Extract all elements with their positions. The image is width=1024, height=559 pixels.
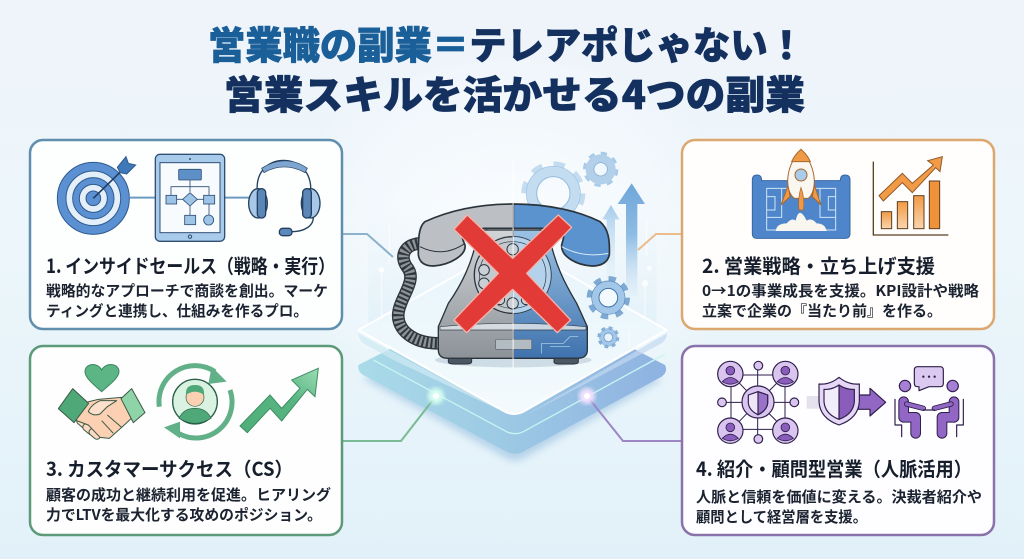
panel 3: customer success: [30, 346, 342, 535]
description: [696, 486, 982, 527]
heading: 3. カスタマーサクセス（CS）: [46, 453, 293, 482]
icon: shield and arrow: [819, 377, 886, 425]
icons row: network, shield, meeting: [718, 361, 963, 443]
icon: customer cycle: [159, 366, 232, 438]
body right blue: [513, 230, 587, 358]
center seam: [512, 160, 514, 370]
description: 0→1の事業成長を支援。KPI設計や戦略: [702, 280, 979, 301]
heading: 1. インサイドセールス（戦略・実行）: [46, 250, 335, 279]
holographic back panels: [368, 207, 657, 403]
dial: [474, 237, 551, 313]
red cross: [454, 215, 572, 333]
heading: 4. 紹介・顧問型営業（人脈活用）: [696, 453, 972, 482]
icon: consultation: [895, 367, 963, 437]
circuit lines on panels: [379, 220, 651, 347]
description: 顧問として経営層を支援。: [696, 506, 867, 527]
gear mid right: [589, 279, 627, 317]
description: 立案で企業の『当たり前』を作る。: [702, 300, 942, 321]
glowing nodes: [428, 388, 595, 404]
gear small top: [585, 154, 616, 185]
title: [208, 15, 805, 121]
icon: rocket on blueprint: [752, 149, 850, 238]
connector lines: [342, 234, 682, 441]
icon: handshake: [58, 389, 145, 441]
icon: upward arrow: [240, 368, 318, 433]
icons row: target, tablet, headset: [57, 154, 320, 241]
growth arrows: [602, 183, 645, 297]
description: [46, 280, 328, 321]
title: 営業職の副業＝テレアポじゃない！: [208, 15, 805, 70]
icons row: handshake, cycle, arrow: [58, 365, 318, 441]
icon: headset: [249, 160, 320, 236]
telephone: [398, 204, 609, 367]
central illustration: [358, 154, 667, 460]
icon: heart: [85, 365, 119, 392]
handset: [418, 204, 513, 266]
description: ティングと連携し、仕組みを作るプロ。: [46, 300, 308, 321]
cradle: [475, 218, 552, 230]
description: [702, 280, 979, 321]
icon: trust network: [718, 361, 799, 443]
icon: target: [57, 157, 136, 234]
heading: 2. 営業戦略・立ち上げ支援: [702, 250, 935, 279]
icon: growth chart: [873, 157, 948, 235]
soft center glow: [272, 60, 752, 440]
panel 4: referral and advisory: [682, 346, 994, 535]
gear low right: [599, 328, 618, 347]
description: 人脈と信頼を価値に変える。決裁者紹介や: [696, 486, 982, 507]
icon: tablet flowchart: [155, 154, 225, 241]
curly cord: [398, 243, 438, 343]
description: [46, 484, 331, 525]
gear large: [524, 164, 582, 222]
description: 戦略的なアプローチで商談を創出。マーケ: [46, 280, 328, 301]
description: 力でLTVを最大化する攻めのポジション。: [46, 504, 322, 525]
icons row: rocket, chart: [752, 149, 948, 238]
description: 顧客の成功と継続利用を促進。ヒアリング: [46, 484, 331, 505]
nameplate: [496, 339, 532, 349]
title: 営業スキルを活かせる4つの副業: [224, 65, 805, 121]
panel 1: inside sales: [30, 140, 342, 329]
icon: soft arrow tail: [807, 396, 822, 409]
body left gray: [438, 230, 513, 358]
feet: [448, 358, 578, 364]
panel 2: sales strategy: [682, 140, 994, 329]
phone shadow: [435, 353, 592, 367]
platform: [358, 243, 667, 460]
